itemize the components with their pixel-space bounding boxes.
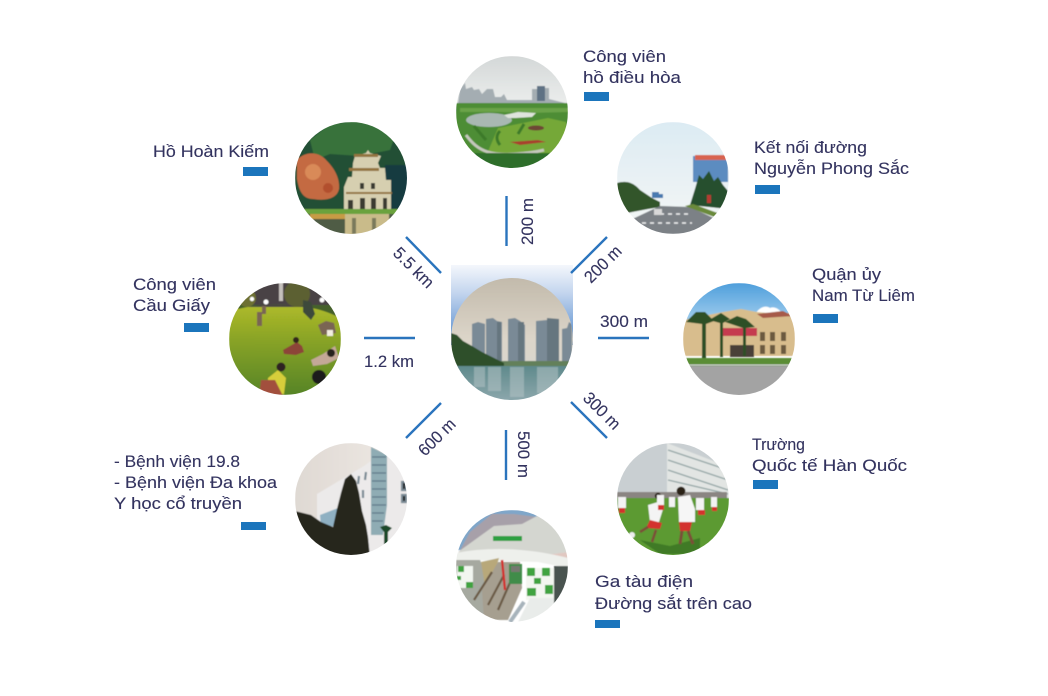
photo: residential towers by the lake <box>450 277 574 403</box>
label: Ga tàu điện Đường sắt trên cao: Đường sắt trên cao <box>595 594 752 613</box>
photo: Hồ Hoàn Kiếm <box>295 120 410 236</box>
label: Trường Quốc tế Hàn Quốc: Quốc tế Hàn Quốc <box>752 456 908 475</box>
label: Ga tàu điện Đường sắt trên cao: Ga tàu điện <box>595 572 693 591</box>
label: Ga tàu điện Đường sắt trên cao <box>595 572 752 628</box>
label: Bệnh viện list <box>114 452 278 530</box>
label: Hồ Hoàn Kiếm <box>153 142 269 176</box>
photo: đường Nguyễn Phong Sắc <box>617 122 729 234</box>
distance: 600 m south-west: 600 m <box>414 415 460 460</box>
label: Kết nối đường Nguyễn Phong Sắc: Kết nối đường <box>754 138 867 157</box>
photo: Quận ủy Nam Từ Liêm <box>683 283 795 396</box>
distance: 200 m north-east: 200 m <box>580 242 626 287</box>
distance: 1.2 km west <box>364 338 415 371</box>
label: Công viên Cầu Giấy <box>133 275 216 332</box>
photo: Công viên Cầu Giấy <box>229 281 341 396</box>
distance: 5.5 km north-west: 5.5 km <box>389 243 438 292</box>
distance: 300 m south-east: 300 m <box>579 388 624 434</box>
label: Bệnh viện list: - Bệnh viện Đa khoa <box>114 473 278 492</box>
label: Công viên hồ điều hòa <box>583 47 682 101</box>
label: Công viên Cầu Giấy: Công viên <box>133 275 216 294</box>
label: Hồ Hoàn Kiếm: Hồ Hoàn Kiếm <box>153 142 269 161</box>
label: Quận ủy Nam Từ Liêm <box>812 265 915 323</box>
label: Kết nối đường Nguyễn Phong Sắc <box>754 138 910 194</box>
distance: 300 m east: 300 m <box>600 312 648 331</box>
distance: 300 m east <box>598 312 649 338</box>
label: Bệnh viện list: Y học cổ truyền <box>114 494 242 513</box>
photo: Công viên hồ điều hòa <box>453 56 568 169</box>
label: Công viên Cầu Giấy: Cầu Giấy <box>133 296 211 315</box>
distance: 500 m south: 500 m <box>514 431 533 478</box>
label: Quận ủy Nam Từ Liêm: Nam Từ Liêm <box>812 286 915 305</box>
distance: 1.2 km west: 1.2 km <box>364 352 414 371</box>
distance: 200 m north: 200 m <box>518 198 537 245</box>
label: Kết nối đường Nguyễn Phong Sắc: Nguyễn Phong Sắc <box>754 159 910 178</box>
label: Công viên hồ điều hòa: Công viên <box>583 47 666 66</box>
label: Trường Quốc tế Hàn Quốc <box>752 435 908 489</box>
distance: 600 m south-west <box>406 403 460 460</box>
label: Quận ủy Nam Từ Liêm: Quận ủy <box>812 265 882 284</box>
distance: 200 m north <box>506 196 537 246</box>
photo: Trường Quốc tế Hàn Quốc <box>617 443 729 557</box>
photo: Ga tàu điện <box>456 510 568 624</box>
distance: 500 m south <box>506 430 533 480</box>
label: Bệnh viện list: - Bệnh viện 19.8 <box>114 452 240 471</box>
label: Trường Quốc tế Hàn Quốc: Trường <box>752 435 805 454</box>
photo: Bệnh viện <box>291 443 412 557</box>
label: Công viên hồ điều hòa: hồ điều hòa <box>583 68 682 87</box>
panel: centre photo with gradient backing <box>450 265 574 403</box>
